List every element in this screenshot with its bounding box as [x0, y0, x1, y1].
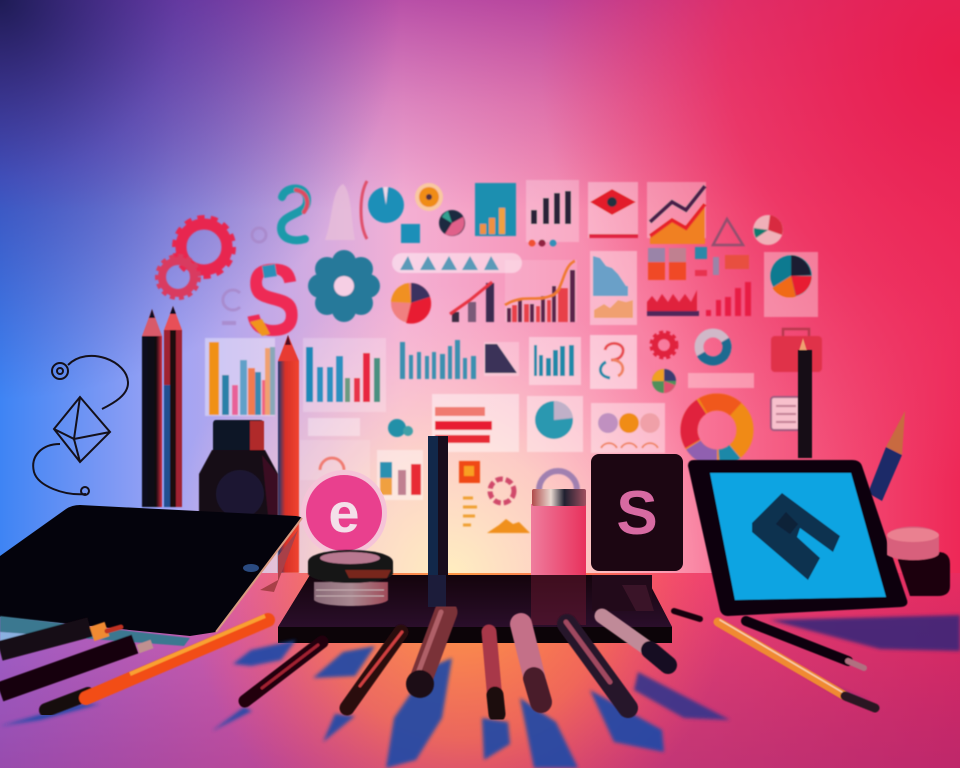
shadows on table — [0, 640, 870, 768]
pencil: second dark red — [164, 306, 182, 507]
card: red horizontal bars — [432, 394, 519, 452]
donut: large — [678, 391, 756, 469]
platform: glossy black — [278, 575, 672, 643]
card: pie chart — [764, 252, 818, 317]
card: dark bars — [526, 180, 579, 246]
block: stacked color bars — [647, 247, 751, 316]
ink bottle — [199, 420, 278, 524]
discs: right stack — [887, 526, 950, 596]
pencils behind — [142, 306, 905, 573]
card: bars with orange curve — [505, 260, 577, 322]
black card: letter S — [591, 454, 683, 571]
pill banner of triangles — [392, 253, 522, 273]
icon: flower ring — [308, 250, 380, 322]
black pen — [746, 621, 864, 668]
center pens — [245, 612, 668, 714]
left tablet — [0, 505, 302, 636]
icon: swirl number — [281, 188, 307, 240]
icon: purple list — [771, 397, 801, 430]
bars: trend arrow — [450, 282, 494, 322]
pie: four colors — [391, 283, 431, 324]
pen: black with orange tip — [0, 627, 121, 651]
brush with orange handle — [674, 611, 875, 708]
card: blue and orange bars — [590, 251, 637, 325]
pie: dark small — [439, 210, 465, 236]
icon: blue square — [401, 224, 420, 243]
pen 4 — [489, 632, 497, 714]
card: blue bar chart — [475, 183, 516, 236]
tube: dark bar — [428, 436, 448, 608]
card: circle trio — [591, 403, 665, 453]
pen 1 — [245, 642, 322, 701]
pen 5 — [521, 624, 541, 702]
card: red diamond eye — [588, 182, 638, 238]
black card: letter S: S — [616, 479, 658, 548]
pen 7 — [602, 616, 668, 665]
wall of chart icons — [157, 180, 822, 533]
card: teal pie — [527, 396, 583, 452]
card: teal bars — [529, 337, 581, 385]
card: blue and red bars — [303, 338, 386, 412]
icon: red gear small — [651, 332, 677, 358]
pale label — [688, 373, 754, 388]
card: small bars — [377, 450, 423, 500]
pen 6 — [566, 622, 628, 708]
icon: arch donut — [539, 471, 577, 490]
right pens — [674, 611, 875, 708]
card: zigzag trend chart — [647, 182, 706, 244]
pie: orange dot — [415, 183, 443, 211]
icon: red briefcase — [771, 329, 822, 372]
icon: dark 3D letter — [752, 493, 840, 580]
list: orange lines — [463, 498, 477, 525]
icon: ring arc — [320, 458, 344, 470]
table surface — [0, 573, 960, 768]
right tablet — [688, 460, 907, 616]
cylinder: pink cup — [531, 489, 586, 575]
badge: letter e: e — [328, 481, 360, 544]
icon: dark trapezoid card — [484, 342, 519, 376]
card: number 3 icon — [590, 335, 637, 389]
card: colored bars left — [205, 338, 275, 416]
pie: small mixed — [753, 215, 783, 245]
icon: large letter S: S — [245, 243, 301, 357]
tray strip — [0, 616, 190, 646]
icon: hand drawn geometric squiggle — [33, 356, 128, 495]
area chart: orange mountain — [487, 519, 530, 533]
pen: black lower — [0, 644, 152, 692]
pencil: red front — [278, 335, 299, 573]
icon: triangle — [713, 219, 743, 245]
pencil: diagonal navy — [868, 411, 905, 501]
badge: letter e — [301, 470, 387, 556]
pie: blue — [368, 187, 404, 223]
jar: lens container — [308, 550, 393, 606]
icon: red gears — [157, 218, 233, 298]
pale panels — [300, 418, 370, 480]
pen: orange long — [46, 616, 268, 710]
pen 3 — [406, 612, 446, 698]
shadow: right tablet — [770, 615, 960, 651]
pencil: right black — [798, 338, 812, 458]
icon: small pale glyphs — [222, 228, 266, 323]
pencil: left dark — [142, 309, 162, 507]
pen 2 — [347, 632, 402, 708]
pie: tiny multicolor — [652, 369, 676, 393]
icon: ring chart — [490, 479, 514, 503]
donut: blue — [694, 328, 732, 366]
left tray and pens — [0, 616, 268, 710]
icon: pale arch and bracket — [325, 181, 367, 240]
icon: teal blob — [388, 419, 413, 437]
bars: thin blue — [400, 340, 476, 379]
icon: orange square — [459, 461, 480, 483]
